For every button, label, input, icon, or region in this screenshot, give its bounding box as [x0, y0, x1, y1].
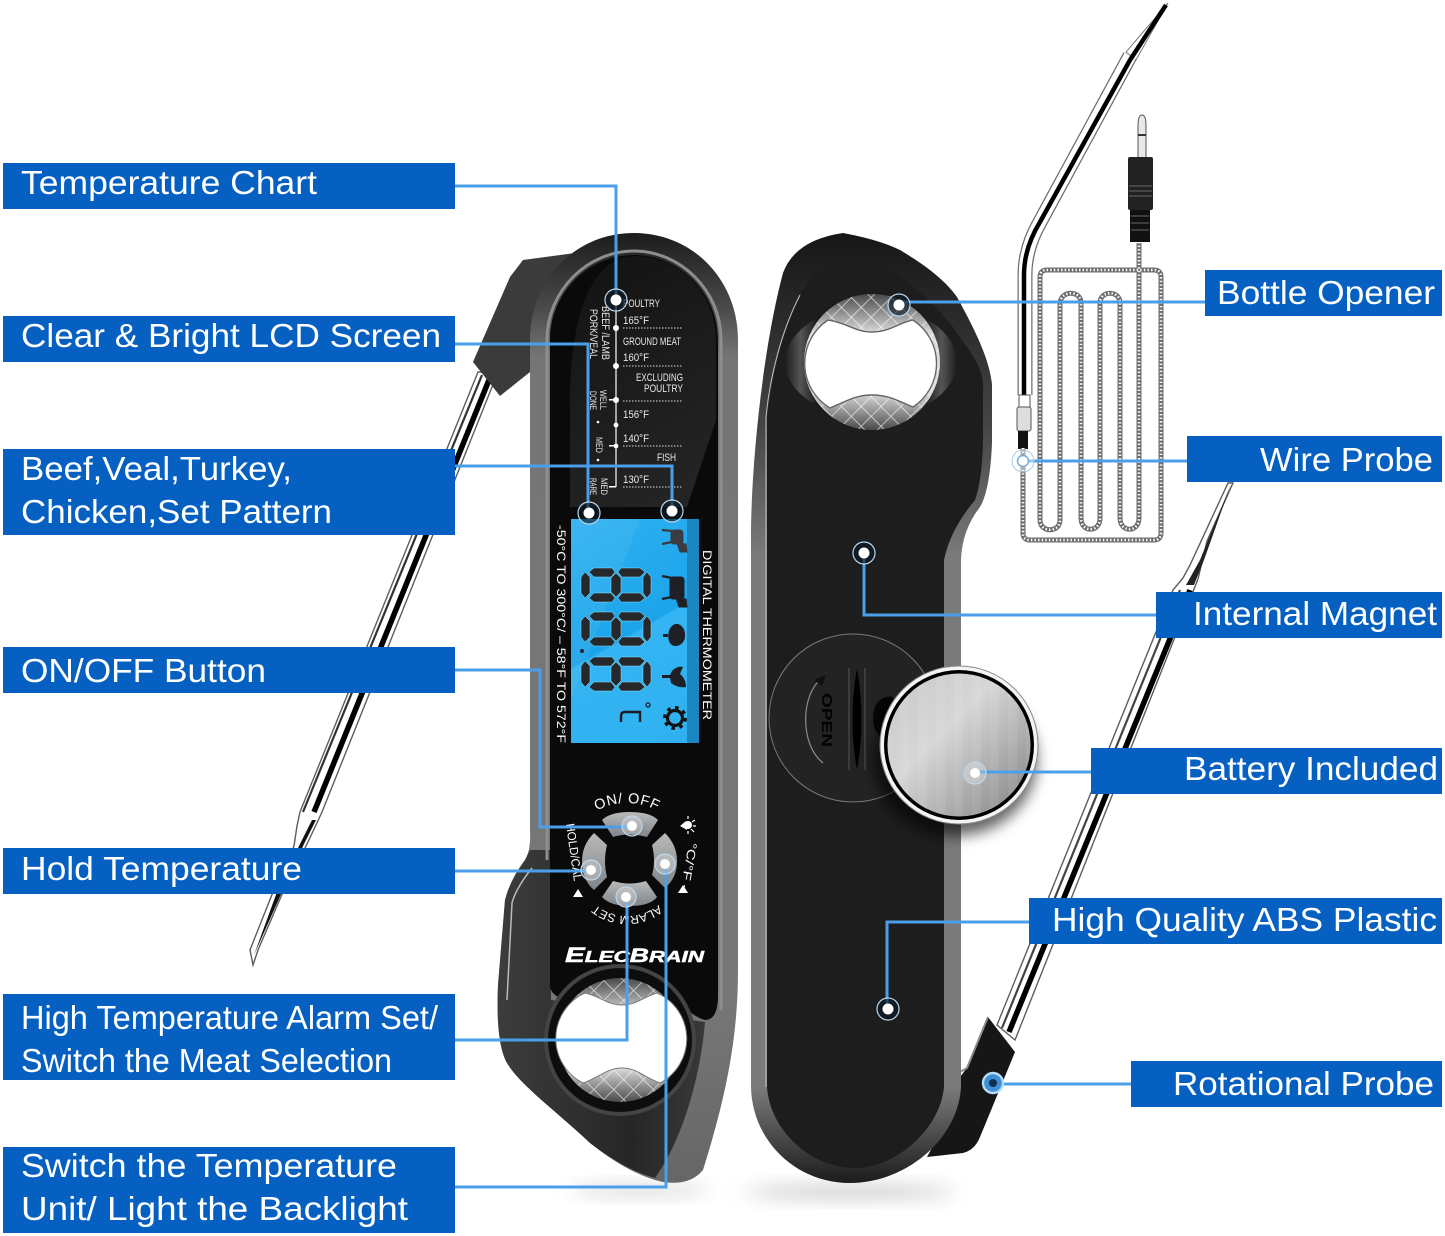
temperature chart: 140°F — [623, 433, 649, 445]
label: abs plastic: High Quality ABS Plastic — [1052, 901, 1437, 938]
line: temperature chart — [455, 186, 616, 300]
label: alarm — [3, 994, 455, 1080]
leader lines — [455, 186, 1205, 1187]
on off button — [602, 812, 658, 837]
temperature chart: RARE — [588, 478, 598, 495]
control buttons — [563, 792, 700, 924]
right folded probe — [997, 483, 1233, 1040]
temperature chart: GROUND MEAT — [623, 336, 681, 348]
label: hold temperature: Hold Temperature — [21, 850, 302, 887]
right body shell — [751, 233, 992, 1183]
label: battery: Battery Included — [1184, 750, 1438, 787]
icon: cow — [662, 530, 687, 552]
line: alarm — [455, 897, 627, 1040]
right face — [767, 262, 983, 1168]
label: unit switch: Unit/ Light the Backlight — [21, 1190, 408, 1227]
line: unit — [455, 864, 666, 1187]
icon: gear — [664, 708, 686, 728]
alarm set caption: ALARM SET — [591, 905, 660, 924]
icon: backlight sun — [680, 816, 696, 834]
ground shadows — [570, 1185, 955, 1198]
temperature chart — [587, 298, 683, 495]
right thermometer — [751, 233, 1038, 1183]
icon: turkey — [663, 624, 685, 646]
line: LCD — [455, 344, 588, 512]
coin battery — [880, 666, 1038, 824]
on off caption: ON/ OFF — [594, 792, 660, 809]
label: internal magnet: Internal Magnet — [1193, 595, 1437, 632]
temperature chart: 165°F — [623, 315, 649, 327]
braided cable — [1023, 243, 1161, 540]
open text: OPEN — [818, 693, 835, 747]
audio jack — [1128, 115, 1153, 242]
battery cover — [769, 634, 937, 802]
icon: chicken — [662, 667, 686, 687]
temperature chart: FISH — [657, 452, 676, 464]
label: alarm: High Temperature Alarm Set/ — [21, 999, 439, 1036]
body bevel highlight — [547, 251, 721, 1010]
left thermometer — [473, 233, 738, 1183]
alarm button — [602, 881, 657, 906]
right hinge — [927, 1017, 1015, 1157]
line: on off — [455, 670, 632, 827]
lower dark body — [498, 850, 705, 1178]
temperature chart: 156°F — [623, 409, 649, 421]
right face edge highlight — [766, 295, 800, 1087]
seven segment digits — [581, 568, 651, 691]
temperature chart: BEEF /LAMB — [599, 306, 611, 360]
cover slot — [852, 668, 862, 770]
left body shell — [498, 233, 738, 1183]
line: hold — [455, 870, 591, 872]
left probe — [250, 372, 498, 965]
label: internal magnet — [1156, 592, 1442, 638]
label: hold temperature — [3, 848, 455, 894]
temperature chart: DONE — [588, 391, 598, 410]
temperature chart: 130°F — [623, 474, 649, 486]
left hinge — [473, 253, 575, 396]
label: temperature chart: Temperature Chart — [21, 164, 317, 201]
label: unit switch — [3, 1147, 455, 1233]
brand logo: E LEC B RAIN — [565, 944, 705, 967]
temperature chart: 160°F — [623, 352, 649, 364]
label: wire probe: Wire Probe — [1260, 441, 1433, 478]
lighter glass reflection — [570, 256, 716, 507]
icon: beef — [662, 576, 687, 607]
line: wire probe — [1023, 460, 1187, 462]
temperature chart: POULTRY — [623, 298, 660, 310]
line: abs plastic — [887, 922, 1029, 1009]
label: rotational probe — [1131, 1061, 1442, 1107]
label: wire probe — [1187, 436, 1442, 482]
temperature chart: WELL — [598, 390, 608, 410]
battery shadow — [873, 684, 1037, 836]
label: battery — [1091, 748, 1442, 794]
digital thermometer text: DIGITAL THERMOMETER — [700, 550, 714, 720]
temperature chart: MED — [594, 437, 604, 453]
label: on off — [3, 647, 455, 693]
label: meat modes — [3, 449, 455, 535]
unit caption: °C/°F - — [678, 841, 700, 891]
label: meat modes: Beef,Veal,Turkey, — [21, 450, 292, 487]
wire probe accessory — [1017, 3, 1168, 540]
range text: -50°C TO 300°C/ – 58°F TO 572°F — [554, 525, 568, 743]
label: alarm: Switch the Meat Selection — [21, 1042, 392, 1079]
line: rotational — [993, 1082, 1131, 1086]
label: LCD screen: Clear & Bright LCD Screen — [21, 317, 441, 354]
bottle opener recess — [785, 306, 957, 418]
temperature chart: POULTRY — [644, 383, 683, 395]
wire probe rod — [1017, 3, 1168, 449]
open arrow — [806, 678, 823, 763]
label: rotational probe: Rotational Probe — [1173, 1065, 1434, 1102]
bottle opener hole right — [804, 294, 940, 430]
line: magnet — [864, 553, 1156, 615]
unit button — [652, 833, 677, 888]
line: battery — [975, 770, 1091, 774]
LCD screen — [571, 519, 699, 743]
temperature chart: MED — [599, 478, 609, 495]
label: temperature chart — [3, 163, 455, 209]
line: bottle opener — [900, 300, 1205, 304]
label: bottle opener: Bottle Opener — [1217, 274, 1435, 311]
bottle opener hole left — [544, 964, 696, 1116]
temperature chart: EXCLUDING — [636, 372, 683, 384]
icon: celsius mark — [621, 703, 650, 722]
label: unit switch: Switch the Temperature — [21, 1147, 397, 1184]
hold button — [582, 833, 607, 890]
callout markers — [578, 289, 1034, 1093]
label: on off: ON/OFF Button — [21, 652, 266, 689]
black face panel — [550, 255, 718, 1020]
temperature chart: PORK/VEAL — [587, 309, 599, 359]
label: meat modes: Chicken,Set Pattern — [21, 493, 332, 530]
label: bottle opener — [1205, 270, 1442, 316]
line: set pattern — [455, 466, 672, 510]
hold caption: HOLD/CAL — [563, 822, 585, 882]
